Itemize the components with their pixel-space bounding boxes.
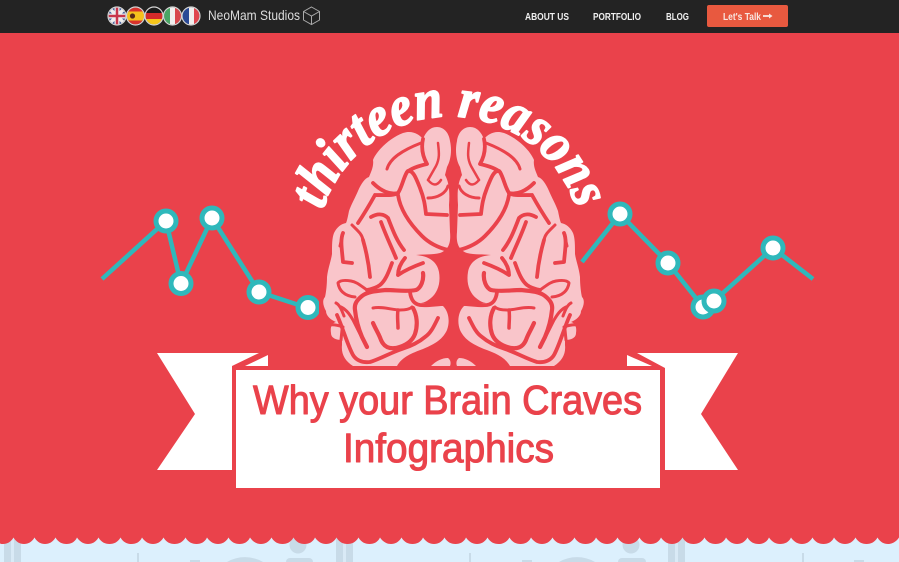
line chart: left xyxy=(102,208,323,321)
ribbon main panel xyxy=(236,370,660,488)
title: Why your Brain Craves xyxy=(253,377,642,423)
language flags xyxy=(108,7,201,25)
ribbon banner xyxy=(157,353,738,488)
left hemisphere xyxy=(323,127,451,366)
ribbon right fold xyxy=(627,355,652,366)
ribbon left fold xyxy=(245,355,268,366)
ribbon left tail xyxy=(157,353,259,470)
icon: cube xyxy=(304,7,320,24)
title xyxy=(253,377,642,471)
right hemisphere xyxy=(456,127,584,366)
button: let's talk xyxy=(707,5,788,27)
brain illustration xyxy=(323,127,584,366)
header bar xyxy=(0,0,899,33)
nav links: PORTFOLIO xyxy=(593,11,641,23)
button: let's talk: Let's Talk xyxy=(723,11,761,23)
faded icons row xyxy=(4,535,864,562)
ribbon right tail xyxy=(637,353,738,470)
title: Infographics xyxy=(343,425,554,471)
logo text: NeoMam Studios xyxy=(208,7,300,23)
nav links: ABOUT US xyxy=(525,11,569,23)
line chart: right xyxy=(582,204,813,317)
nav links: BLOG xyxy=(666,11,689,23)
curved heading: thirteen reasons: thirteen reasons xyxy=(294,90,601,208)
nav links xyxy=(525,11,689,23)
